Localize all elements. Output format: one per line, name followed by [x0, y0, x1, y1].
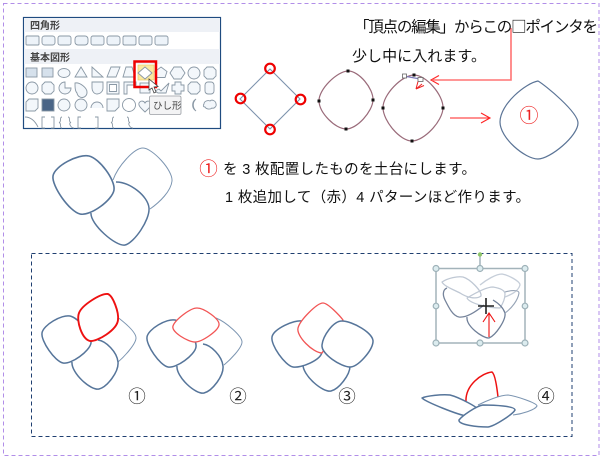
arrow: to result	[450, 113, 490, 123]
text: instruction line 1: 「頂点の編集」からこの□ポインタを	[354, 15, 598, 37]
shape: diamond with red vertices	[236, 64, 305, 134]
highlight: diamond button	[138, 65, 154, 80]
panel: dashed patterns box	[32, 254, 572, 436]
number: result: ①	[519, 105, 539, 127]
icon: cursor	[149, 79, 158, 93]
callout line	[433, 28, 511, 80]
selection box: red	[134, 62, 156, 87]
tooltip	[150, 96, 182, 114]
text: base description: を 3 枚配置したものを土台にします。	[223, 161, 476, 178]
heading: rectangles: 四角形	[30, 19, 60, 32]
text: instruction line 2: 少し中に入れます。	[352, 48, 486, 65]
pattern 3	[272, 303, 373, 391]
number: 4: ④	[537, 386, 555, 406]
text: pattern description: 1 枚追加して（赤）4 パターンほど作ります。	[225, 189, 530, 206]
icons: rectangle row	[26, 36, 168, 45]
icon: move cross	[478, 298, 494, 314]
icons: basic shape grid	[26, 67, 216, 112]
number: 1: ①	[128, 386, 146, 406]
shape: point being edited	[382, 74, 444, 142]
faded petals	[442, 274, 520, 338]
arrow: callout head	[431, 76, 439, 84]
number: 2: ②	[229, 386, 247, 406]
figure: three petal base	[53, 148, 172, 245]
number: red circled one: ①	[199, 158, 218, 180]
shape: result petal	[500, 81, 578, 159]
arrow: upward	[483, 313, 495, 337]
number: 3: ③	[338, 386, 356, 406]
shape: rounded diamond with points	[318, 70, 374, 130]
panel: shape picker	[24, 18, 220, 128]
pattern 2	[147, 308, 242, 393]
pattern 4	[422, 372, 537, 427]
icons: bracket row	[25, 117, 133, 128]
selection frame with faded petals	[433, 252, 528, 346]
tooltip: ひし形	[153, 100, 182, 112]
pattern 1	[42, 294, 136, 389]
heading: basic shapes: 基本図形	[30, 51, 70, 64]
